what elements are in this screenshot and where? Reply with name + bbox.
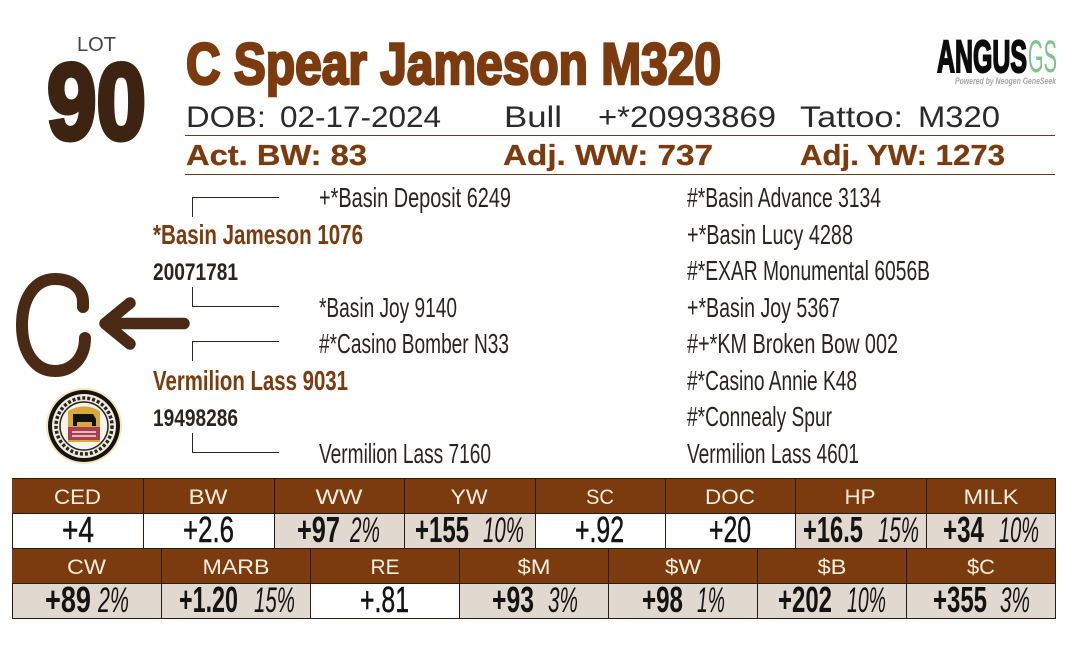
- lot label: LOT: [77, 34, 116, 56]
- great-grandparents column: [687, 182, 930, 469]
- icon: certification seal: [46, 388, 122, 464]
- great-grandparents column: #*Casino Annie K48: [687, 365, 857, 396]
- weights row: Act. BW: 83: [186, 140, 367, 172]
- lot number block: [47, 34, 146, 162]
- great-grandparents column: #*EXAR Monumental 6056B: [687, 255, 930, 286]
- EPD headers row 2: $B: [818, 556, 846, 579]
- animal details row: 02-17-2024: [280, 101, 441, 134]
- animal details row: M320: [918, 101, 1000, 134]
- great-grandparents column: #*Connealy Spur: [687, 401, 832, 432]
- EPD values row 2: 1%: [697, 581, 725, 620]
- arrow: [105, 303, 184, 344]
- EPD headers row 1: HP: [844, 486, 876, 509]
- EPD values row 1: +4: [62, 509, 94, 550]
- grandparents column: Vermilion Lass 7160: [319, 438, 491, 469]
- title: C Spear Jameson M320: [186, 32, 721, 97]
- weights row: [186, 140, 1005, 172]
- EPD headers row 2: CW: [67, 556, 106, 579]
- EPD headers row 2: $C: [967, 556, 995, 579]
- great-grandparents column: #*Basin Advance 3134: [687, 182, 881, 213]
- EPD headers row 1: DOC: [705, 486, 755, 509]
- great-grandparents column: +*Basin Joy 5367: [687, 292, 840, 323]
- lot number: 90: [47, 41, 146, 162]
- icon: C letter: [22, 279, 85, 371]
- EPD values row 2: 3%: [1000, 581, 1030, 620]
- EPD headers row 2: $W: [665, 556, 701, 579]
- great-grandparents column: Vermilion Lass 4601: [687, 438, 859, 469]
- pedigree brackets: [192, 198, 279, 452]
- grandparents column: #*Casino Bomber N33: [319, 328, 509, 359]
- dam: 19498286: [153, 405, 238, 432]
- EPD values row 1: +155: [415, 509, 469, 550]
- table backgrounds: [12, 478, 1056, 618]
- EPD values row 2: +93: [492, 579, 534, 620]
- grandparents column: [319, 182, 511, 469]
- EPD headers row 1: YW: [450, 486, 488, 509]
- EPD values row 1: 10%: [999, 511, 1039, 550]
- weights row: Adj. WW: 737: [503, 140, 713, 172]
- EPD values row 1: +97: [297, 509, 340, 550]
- animal details row: Bull: [504, 101, 562, 134]
- EPD values row 1: [62, 509, 1039, 550]
- EPD values row 2: +202: [778, 579, 832, 620]
- EPD values row 2: 3%: [548, 581, 578, 620]
- EPD values row 2: 15%: [254, 581, 295, 620]
- EPD headers row 1: CED: [54, 486, 101, 509]
- EPD headers row 2: RE: [370, 556, 400, 579]
- EPD headers row 2: MARB: [202, 556, 270, 579]
- EPD values row 2: +1.20: [179, 579, 238, 620]
- grandparents column: +*Basin Deposit 6249: [319, 182, 511, 213]
- dam: [153, 365, 348, 432]
- EPD headers row 1: WW: [316, 486, 363, 509]
- EPD headers row 2: [67, 556, 995, 579]
- EPD values row 1: 15%: [878, 511, 919, 550]
- EPD headers row 1: MILK: [964, 486, 1018, 509]
- great-grandparents column: #+*KM Broken Bow 002: [687, 328, 898, 359]
- EPD headers row 2: $M: [518, 556, 550, 579]
- EPD values row 1: +.92: [575, 509, 624, 550]
- EPD table: [12, 478, 1056, 620]
- EPD headers row 1: SC: [586, 486, 614, 509]
- EPD values row 1: 2%: [349, 511, 380, 550]
- EPD headers row 1: BW: [188, 486, 228, 509]
- EPD values row 2: +355: [933, 579, 987, 620]
- EPD values row 1: +2.6: [183, 509, 234, 550]
- animal details row: +*20993869: [598, 101, 776, 134]
- EPD values row 2: [45, 579, 1030, 620]
- EPD values row 1: +34: [943, 509, 984, 550]
- weights row: Adj. YW: 1273: [800, 140, 1005, 172]
- EPD values row 1: 10%: [483, 511, 524, 550]
- dam: Vermilion Lass 9031: [153, 365, 348, 396]
- sire: 20071781: [153, 259, 238, 286]
- animal details row: [186, 101, 1000, 134]
- animal details row: DOB:: [186, 101, 266, 134]
- EPD values row 2: +89: [45, 579, 91, 620]
- EPD values row 2: +98: [642, 579, 683, 620]
- sire: [153, 219, 363, 286]
- grandparents column: *Basin Joy 9140: [319, 292, 457, 323]
- EPD values row 2: 2%: [97, 581, 129, 620]
- EPD values row 2: +.81: [360, 579, 409, 620]
- sire: *Basin Jameson 1076: [153, 219, 363, 250]
- EPD values row 1: +20: [709, 509, 751, 550]
- EPD values row 2: 10%: [847, 581, 886, 620]
- EPD values row 1: +16.5: [803, 509, 863, 550]
- great-grandparents column: +*Basin Lucy 4288: [687, 219, 853, 250]
- EPD headers row 1: [54, 486, 1018, 509]
- animal details row: Tattoo:: [800, 101, 903, 134]
